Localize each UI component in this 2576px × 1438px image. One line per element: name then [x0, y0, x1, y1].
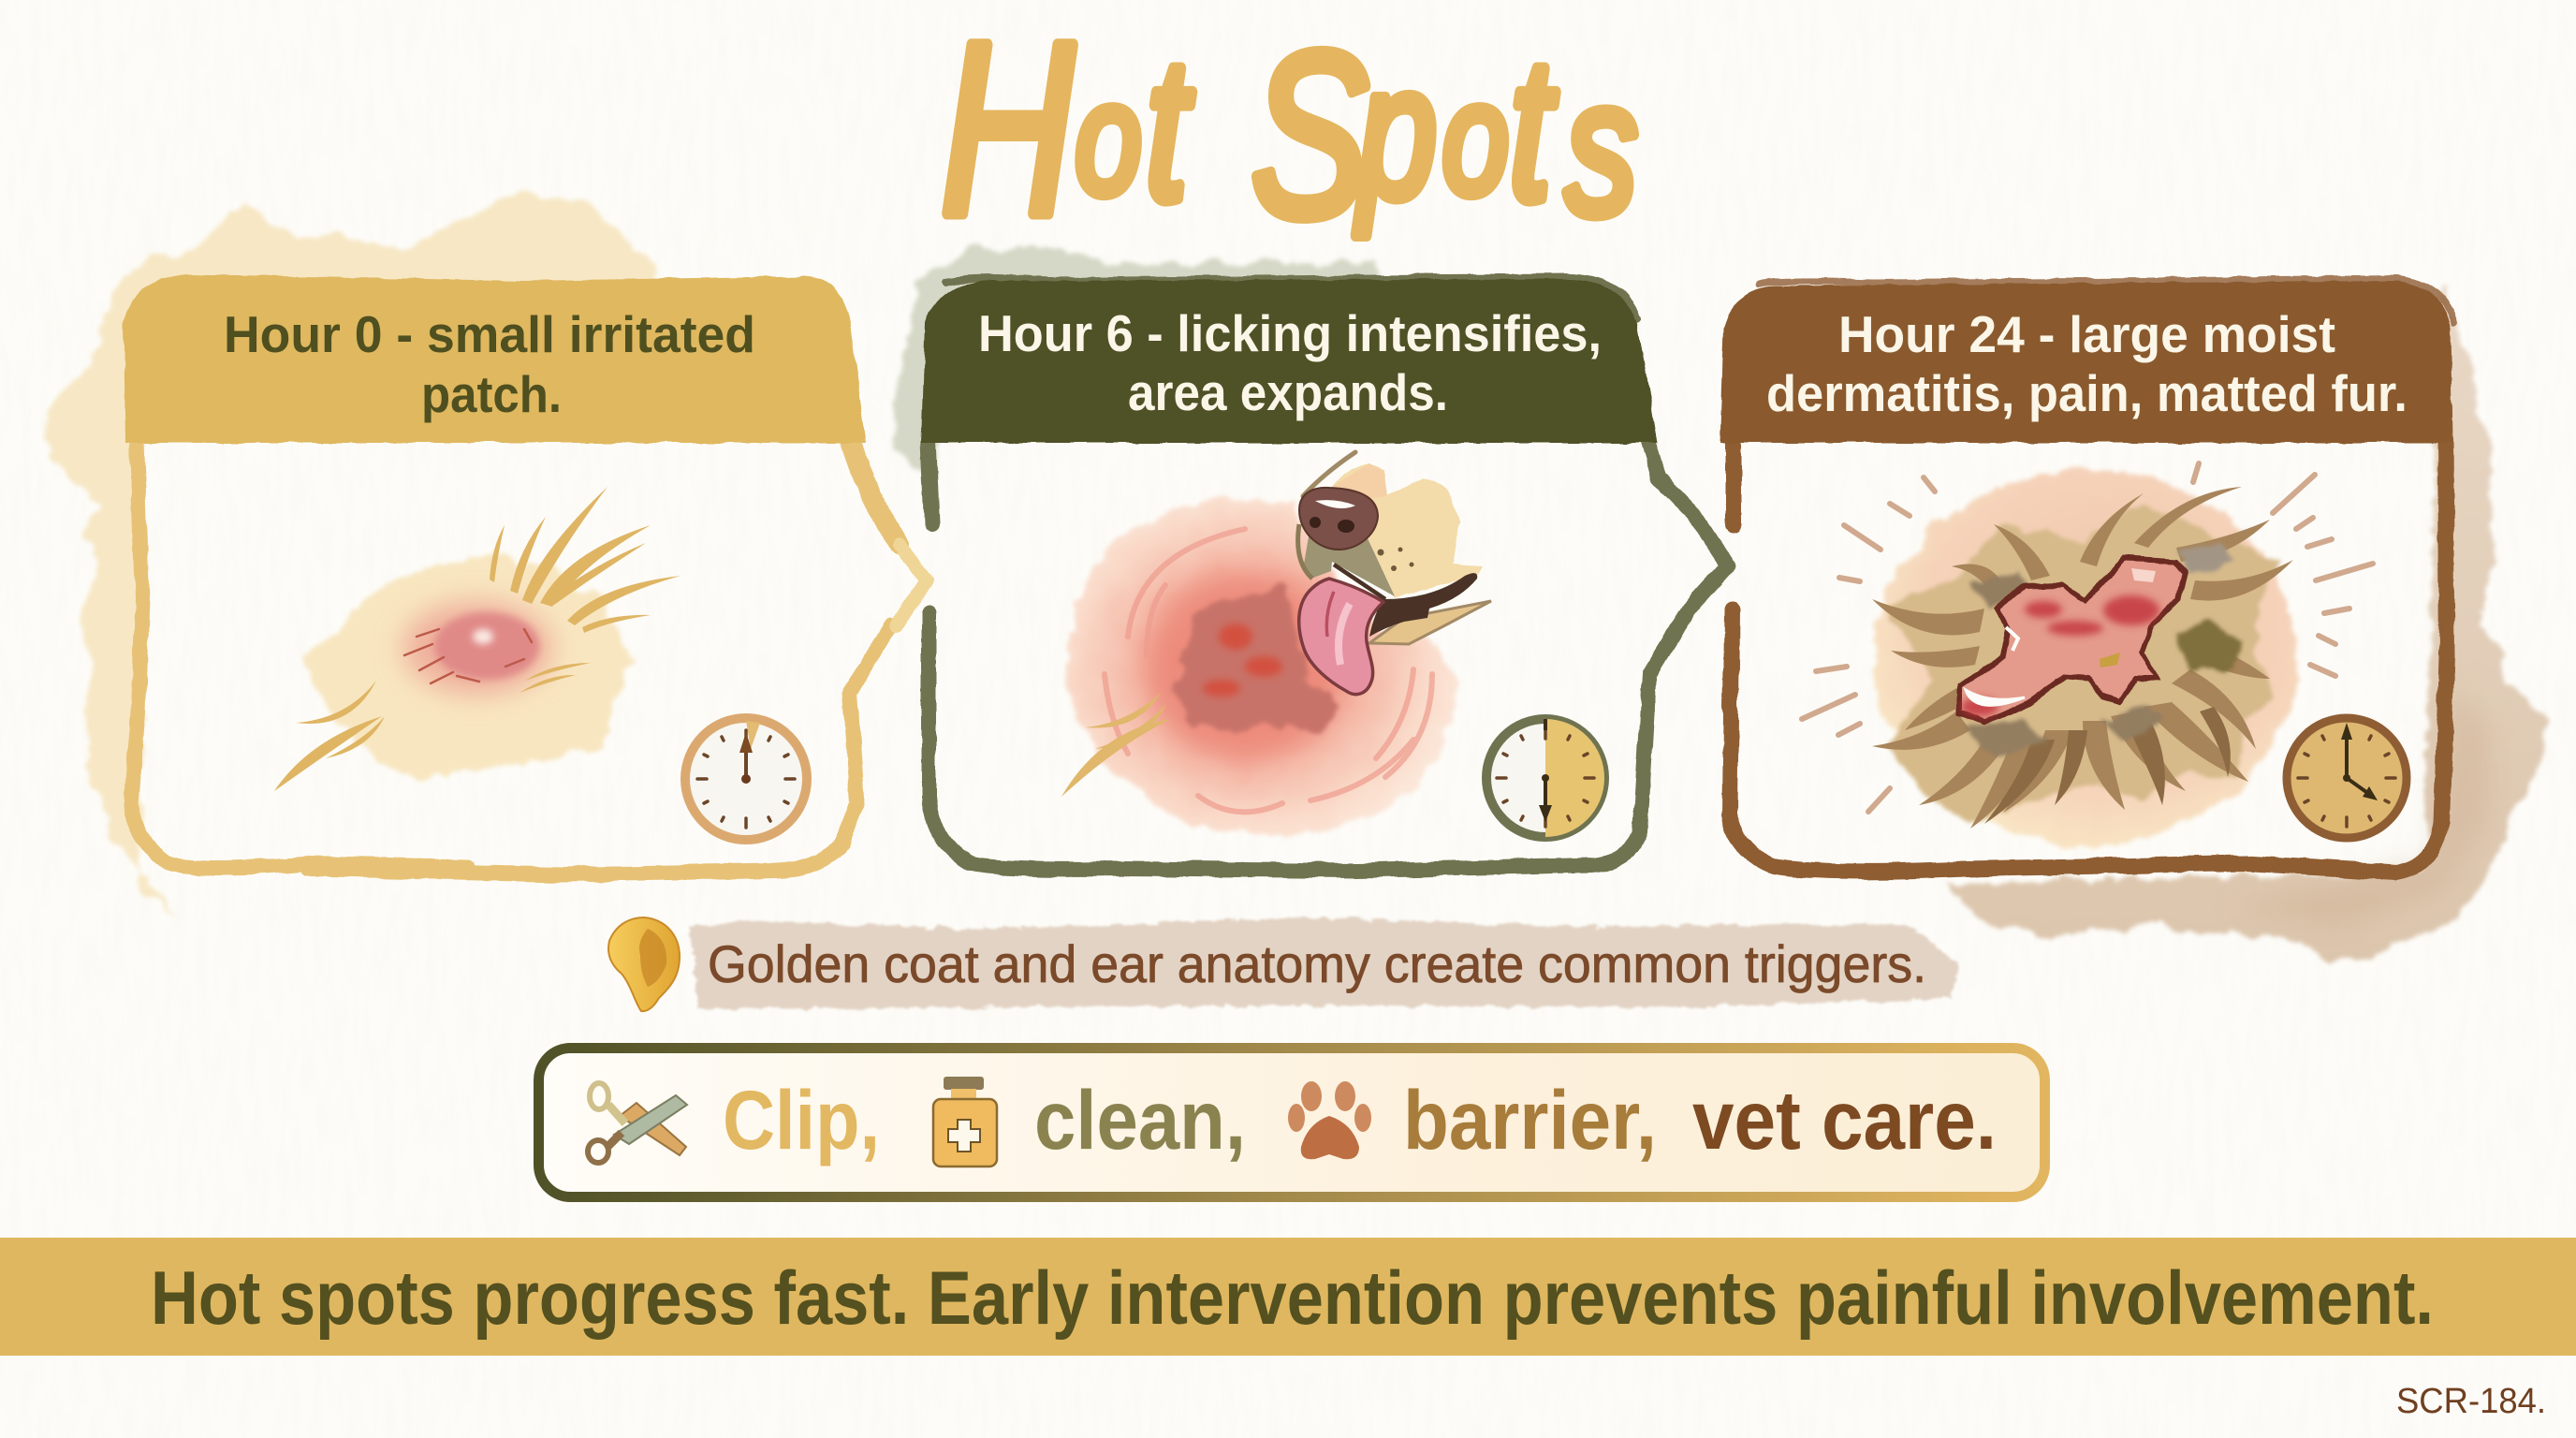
panel 3 header	[1720, 281, 2452, 443]
trigger note banner	[608, 917, 1958, 1011]
panel 3 header text: Hour 24 - large moist	[1838, 305, 2335, 363]
panel 3 frame	[1730, 278, 2454, 873]
dark matted clumps	[1966, 541, 2242, 758]
title: s	[1566, 41, 1637, 255]
icon: paw	[1288, 1081, 1371, 1159]
text: barrier: barrier,	[1403, 1073, 1657, 1167]
panel: Hour 0	[45, 194, 927, 913]
dog chin	[1304, 536, 1395, 596]
panel 1 header	[124, 274, 866, 443]
illustration: small irritated patch	[274, 487, 681, 791]
panel 2 header text: Hour 6 - licking intensifies,	[978, 304, 1602, 362]
illustration: large moist dermatitis with matted fur	[1802, 463, 2373, 844]
dog mouth line	[1369, 573, 1477, 637]
title: o	[1442, 52, 1508, 227]
reference code: SCR-184.	[2396, 1382, 2546, 1421]
panel 2 header text: area expands.	[1128, 363, 1448, 421]
torn brush band	[690, 917, 1958, 1009]
whisker dots	[1378, 547, 1413, 571]
pale skin halo	[1874, 470, 2297, 844]
bottom takeaway band	[0, 1238, 2576, 1356]
watercolor wash behind panel 1	[45, 194, 655, 913]
panel: Hour 24	[1720, 278, 2548, 964]
panel 1 header text: Hour 0 - small irritated	[224, 305, 755, 363]
panel 1 header text: patch.	[421, 365, 562, 423]
illustration: licking dog and expanding lesion	[1061, 452, 1491, 835]
pain rays	[1802, 463, 2373, 812]
title: H	[941, 0, 1075, 267]
title	[941, 0, 1637, 267]
clock: hour 24	[2287, 718, 2407, 838]
expanding pink area	[1066, 497, 1456, 835]
stray fur	[1061, 693, 1171, 797]
title: t	[1146, 18, 1193, 242]
matted fur mass	[1886, 501, 2279, 824]
dark lesion core	[1174, 586, 1340, 736]
text: vet care: vet care.	[1692, 1073, 1997, 1167]
clock: hour 6	[1486, 719, 1604, 837]
text: clean: clean,	[1034, 1073, 1246, 1167]
swirl marks	[1105, 529, 1432, 812]
panel 1 header text	[224, 305, 755, 423]
panel 3 header text: dermatitis, pain, matted fur.	[1766, 364, 2408, 422]
dog tongue	[1299, 579, 1383, 695]
panel 2 header text	[978, 304, 1602, 421]
icon: bottle	[933, 1077, 997, 1167]
title: S	[1251, 4, 1368, 265]
text: clip: Clip,	[723, 1073, 880, 1167]
dog nose	[1299, 488, 1378, 550]
raw lesion	[1956, 555, 2188, 726]
icon: scissors	[588, 1083, 687, 1163]
title: o	[1076, 52, 1141, 227]
dog lower jaw	[1369, 601, 1491, 644]
action box	[539, 1049, 2044, 1196]
watercolor wash behind panel 2	[889, 249, 1381, 478]
panel: Hour 6	[889, 249, 1728, 871]
panel 2 frame	[929, 277, 1728, 871]
watercolor wash behind panel 3	[1947, 281, 2548, 964]
fur strands	[1872, 487, 2293, 829]
note text: Golden coat and ear anatomy create common triggers.	[708, 934, 1926, 993]
title: t	[1509, 18, 1557, 242]
clock: hour 0	[685, 718, 807, 840]
dog muzzle fur	[1332, 463, 1482, 596]
panel 3 header text	[1766, 305, 2408, 422]
icon: ear	[608, 917, 680, 1011]
title: p	[1354, 28, 1437, 237]
panel 1 frame	[131, 440, 927, 874]
panel 2 header	[921, 279, 1658, 443]
